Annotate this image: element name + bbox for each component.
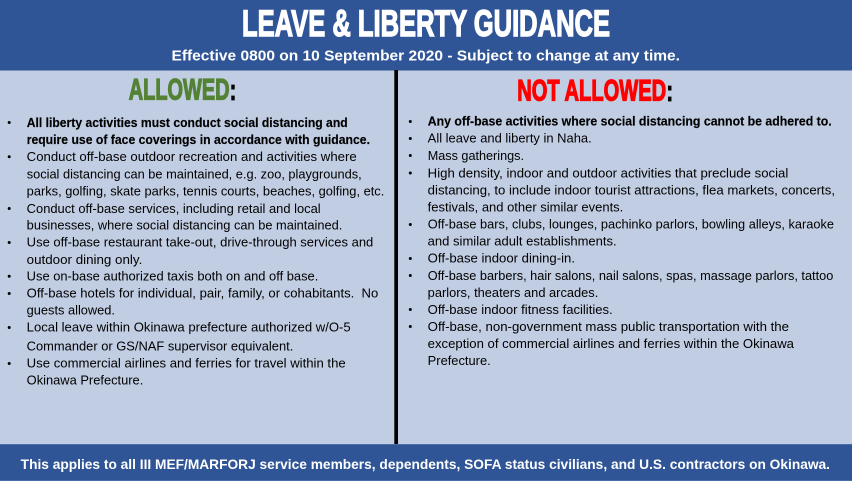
not allowed list: Any off-base activities where social distancing cannot be adhered to. bbox=[428, 114, 832, 129]
allowed list: Conduct off-base outdoor recreation and activities where bbox=[27, 149, 357, 164]
not allowed list: High density, indoor and outdoor activities that preclude social bbox=[428, 166, 788, 181]
heading: not allowed: NOT ALLOWED bbox=[517, 74, 666, 107]
panel: background bbox=[0, 70, 852, 444]
not allowed list: festivals, and other similar events. bbox=[428, 200, 623, 215]
subtitle: Effective 0800 on 10 September 2020 - Subject to change at any time. bbox=[172, 48, 680, 65]
panel: not allowed bbox=[409, 74, 835, 368]
allowed list: Use on-base authorized taxis both on and off base. bbox=[27, 269, 318, 284]
allowed list: Use commercial airlines and ferries for travel within the bbox=[27, 356, 346, 371]
heading: allowed: : bbox=[230, 74, 236, 107]
allowed list: All liberty activities must conduct social distancing and bbox=[27, 115, 348, 130]
allowed list: guests allowed. bbox=[27, 303, 115, 318]
not allowed list: and similar adult establishments. bbox=[428, 234, 617, 249]
not allowed list: Off-base indoor dining-in. bbox=[428, 251, 575, 266]
not allowed list: distancing, to include indoor tourist attractions, flea markets, concerts, bbox=[428, 183, 835, 198]
allowed list: require use of face coverings in accordance with guidance. bbox=[27, 132, 370, 147]
not allowed list: Off-base, non-government mass public transportation with the bbox=[428, 319, 789, 334]
title: LEAVE & LIBERTY GUIDANCE bbox=[242, 2, 610, 44]
allowed list: Okinawa Prefecture. bbox=[27, 372, 143, 387]
not allowed list: Off-base indoor fitness facilities. bbox=[428, 302, 613, 317]
allowed list: Local leave within Okinawa prefecture authorized w/O-5 bbox=[27, 320, 351, 335]
allowed list: outdoor dining only. bbox=[27, 252, 142, 267]
allowed list: social distancing can be maintained, e.g. zoo, playgrounds, bbox=[27, 166, 362, 182]
not allowed list: parlors, theaters and arcades. bbox=[428, 285, 598, 300]
allowed list: parks, golfing, skate parks, tennis courts, beaches, golfing, etc. bbox=[27, 184, 384, 199]
not allowed list bbox=[428, 114, 835, 368]
allowed list: Commander or GS/NAF supervisor equivalent. bbox=[27, 339, 293, 354]
bullet markers: allowed bbox=[8, 121, 11, 365]
bullet markers: not allowed bbox=[409, 120, 412, 328]
divider between columns bbox=[394, 70, 398, 444]
not allowed list: Off-base barbers, hair salons, nail salons, spas, massage parlors, tattoo bbox=[428, 268, 833, 283]
heading: not allowed bbox=[517, 74, 673, 108]
allowed list: Conduct off-base services, including retail and local bbox=[27, 201, 321, 216]
header banner bbox=[0, 0, 852, 70]
allowed list: businesses, where social distancing can be maintained. bbox=[27, 218, 342, 233]
panel: allowed bbox=[8, 73, 384, 387]
not allowed list: exception of commercial airlines and ferries within the Okinawa bbox=[428, 336, 795, 351]
heading: allowed: ALLOWED bbox=[129, 73, 230, 106]
footer text: This applies to all III MEF/MARFORJ service members, dependents, SOFA status civilians, and U.S. contractors on Okinawa. bbox=[21, 457, 830, 472]
heading: not allowed: : bbox=[666, 75, 673, 108]
not allowed list: Mass gatherings. bbox=[428, 148, 524, 163]
allowed list bbox=[27, 115, 384, 387]
not allowed list: Prefecture. bbox=[428, 353, 491, 368]
footer banner bbox=[0, 444, 852, 481]
allowed list: Off-base hotels for individual, pair, family, or cohabitants. No bbox=[27, 286, 378, 301]
allowed list: Use off-base restaurant take-out, drive-through services and bbox=[27, 235, 373, 250]
not allowed list: All leave and liberty in Naha. bbox=[428, 131, 592, 146]
not allowed list: Off-base bars, clubs, lounges, pachinko parlors, bowling alleys, karaoke bbox=[428, 217, 834, 232]
